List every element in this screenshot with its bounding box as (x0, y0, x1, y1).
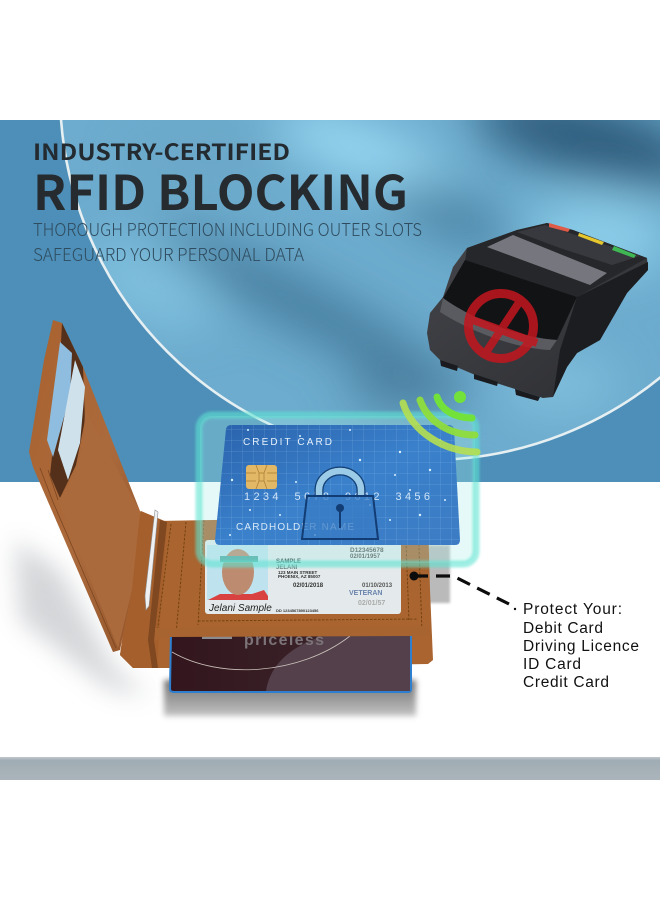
card in slot: blue (47, 342, 72, 457)
callout: protected items (523, 601, 639, 691)
white arc (60, 120, 660, 460)
wallet main body (120, 511, 433, 668)
callout: protected items: Protect Your: (523, 601, 622, 618)
callout: protected items: Driving Licence (523, 638, 639, 655)
subtitle line 2: SAFEGUARD YOUR PERSONAL DATA (33, 241, 304, 267)
blue background panel (0, 0, 660, 500)
heading: industry-certified: INDUSTRY-CERTIFIED (33, 135, 290, 167)
id details (276, 547, 393, 613)
id details: PHOENIX, AZ 85007 (278, 574, 321, 579)
wallet pocket lip (155, 626, 432, 640)
circular light area (62, 120, 660, 458)
cardholder name: CARDHOLDER NAME (236, 522, 354, 533)
wallet side shadow (425, 545, 450, 603)
icon: wireless signal (403, 391, 477, 452)
shielding frame (199, 415, 476, 564)
id details: 123 MAIN STREET (278, 570, 318, 575)
card label: CREDIT CARD (243, 437, 332, 448)
id details: 02/01/1957 (350, 554, 381, 560)
credit card (215, 425, 460, 545)
wallet shadow (15, 540, 150, 695)
icon: payment terminal (427, 223, 648, 401)
callout: protected items: Debit Card (523, 620, 603, 637)
id signature: Jelani Sample (208, 603, 272, 614)
grey bottom band (0, 757, 660, 780)
id details: 01/10/2013 (362, 583, 393, 589)
card word: priceless (244, 632, 324, 649)
id photo (207, 545, 268, 600)
chip (246, 465, 277, 489)
wallet (29, 320, 433, 668)
id details: VETERAN (349, 590, 382, 597)
id details: 02/01/57 (358, 600, 385, 607)
id details: 02/01/2018 (293, 583, 324, 589)
card number: 1234 5678 9012 3456 (244, 491, 430, 503)
card in slot: white (58, 360, 85, 480)
id details: SAMPLE (276, 559, 301, 565)
black card shadow (164, 680, 416, 716)
card sparkles (229, 429, 446, 536)
id details: DD 1234567890123456 (276, 608, 319, 613)
icon: padlock (302, 471, 378, 539)
callout: protected items: ID Card (523, 656, 581, 673)
silver money clip (145, 510, 158, 610)
subtitle line 1: THOROUGH PROTECTION INCLUDING OUTER SLOTS (33, 216, 422, 242)
arrow: dashed leader (410, 572, 516, 610)
wallet flap (29, 320, 140, 652)
icon: red prohibition mark (467, 294, 537, 358)
black card (170, 632, 411, 692)
heading: rfid blocking: RFID BLOCKING (33, 154, 408, 224)
id details: JELANI (276, 565, 298, 571)
id details: D12345678 (350, 547, 384, 554)
id card (205, 540, 401, 614)
callout: protected items: Credit Card (523, 674, 609, 691)
